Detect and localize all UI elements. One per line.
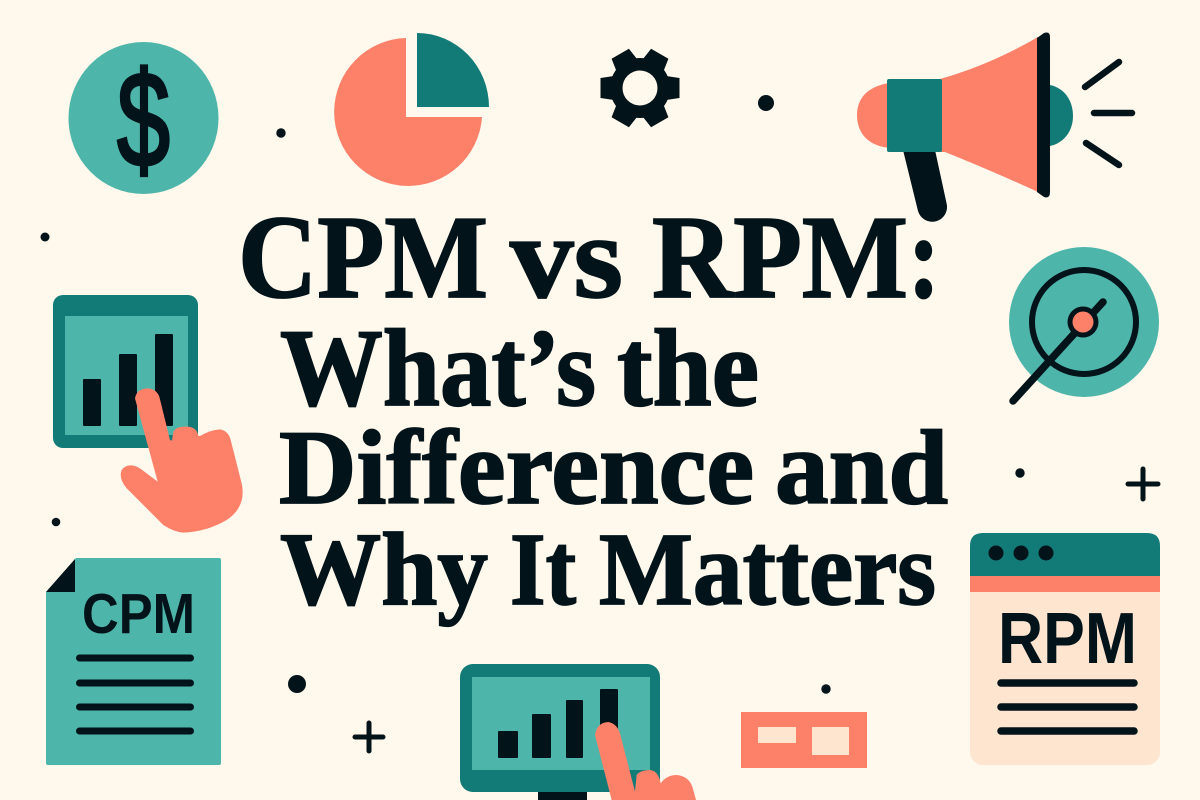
title: Difference [279, 409, 754, 526]
title: Matters [599, 512, 936, 627]
icon: gear [600, 48, 680, 128]
icon: RPM browser window [970, 533, 1160, 765]
icon: dollar coin [68, 42, 218, 195]
icon: target dial [1009, 247, 1159, 401]
title: CPM [238, 191, 488, 323]
title: RPM [652, 191, 908, 323]
icon: CPM document: CPM [82, 582, 195, 646]
icon: monitor with bar chart and hand [460, 664, 696, 800]
icon: megaphone [857, 32, 1132, 222]
icon: RPM browser window: RPM [998, 599, 1137, 679]
title: What’s [280, 307, 596, 429]
title: : [908, 191, 940, 323]
icon: coral ad banner [741, 712, 867, 768]
icon: CPM document [46, 558, 221, 765]
title: and [775, 409, 948, 526]
icon: pie chart [334, 33, 489, 186]
icon: bar chart card with pointing hand [53, 295, 243, 533]
title: vs [510, 191, 623, 323]
title: the [617, 307, 759, 429]
decorative dots and plus signs [40, 95, 1158, 751]
title [238, 191, 948, 627]
title: It [510, 512, 576, 627]
title: Why [280, 512, 488, 627]
icon: dollar coin: $ [117, 43, 170, 195]
